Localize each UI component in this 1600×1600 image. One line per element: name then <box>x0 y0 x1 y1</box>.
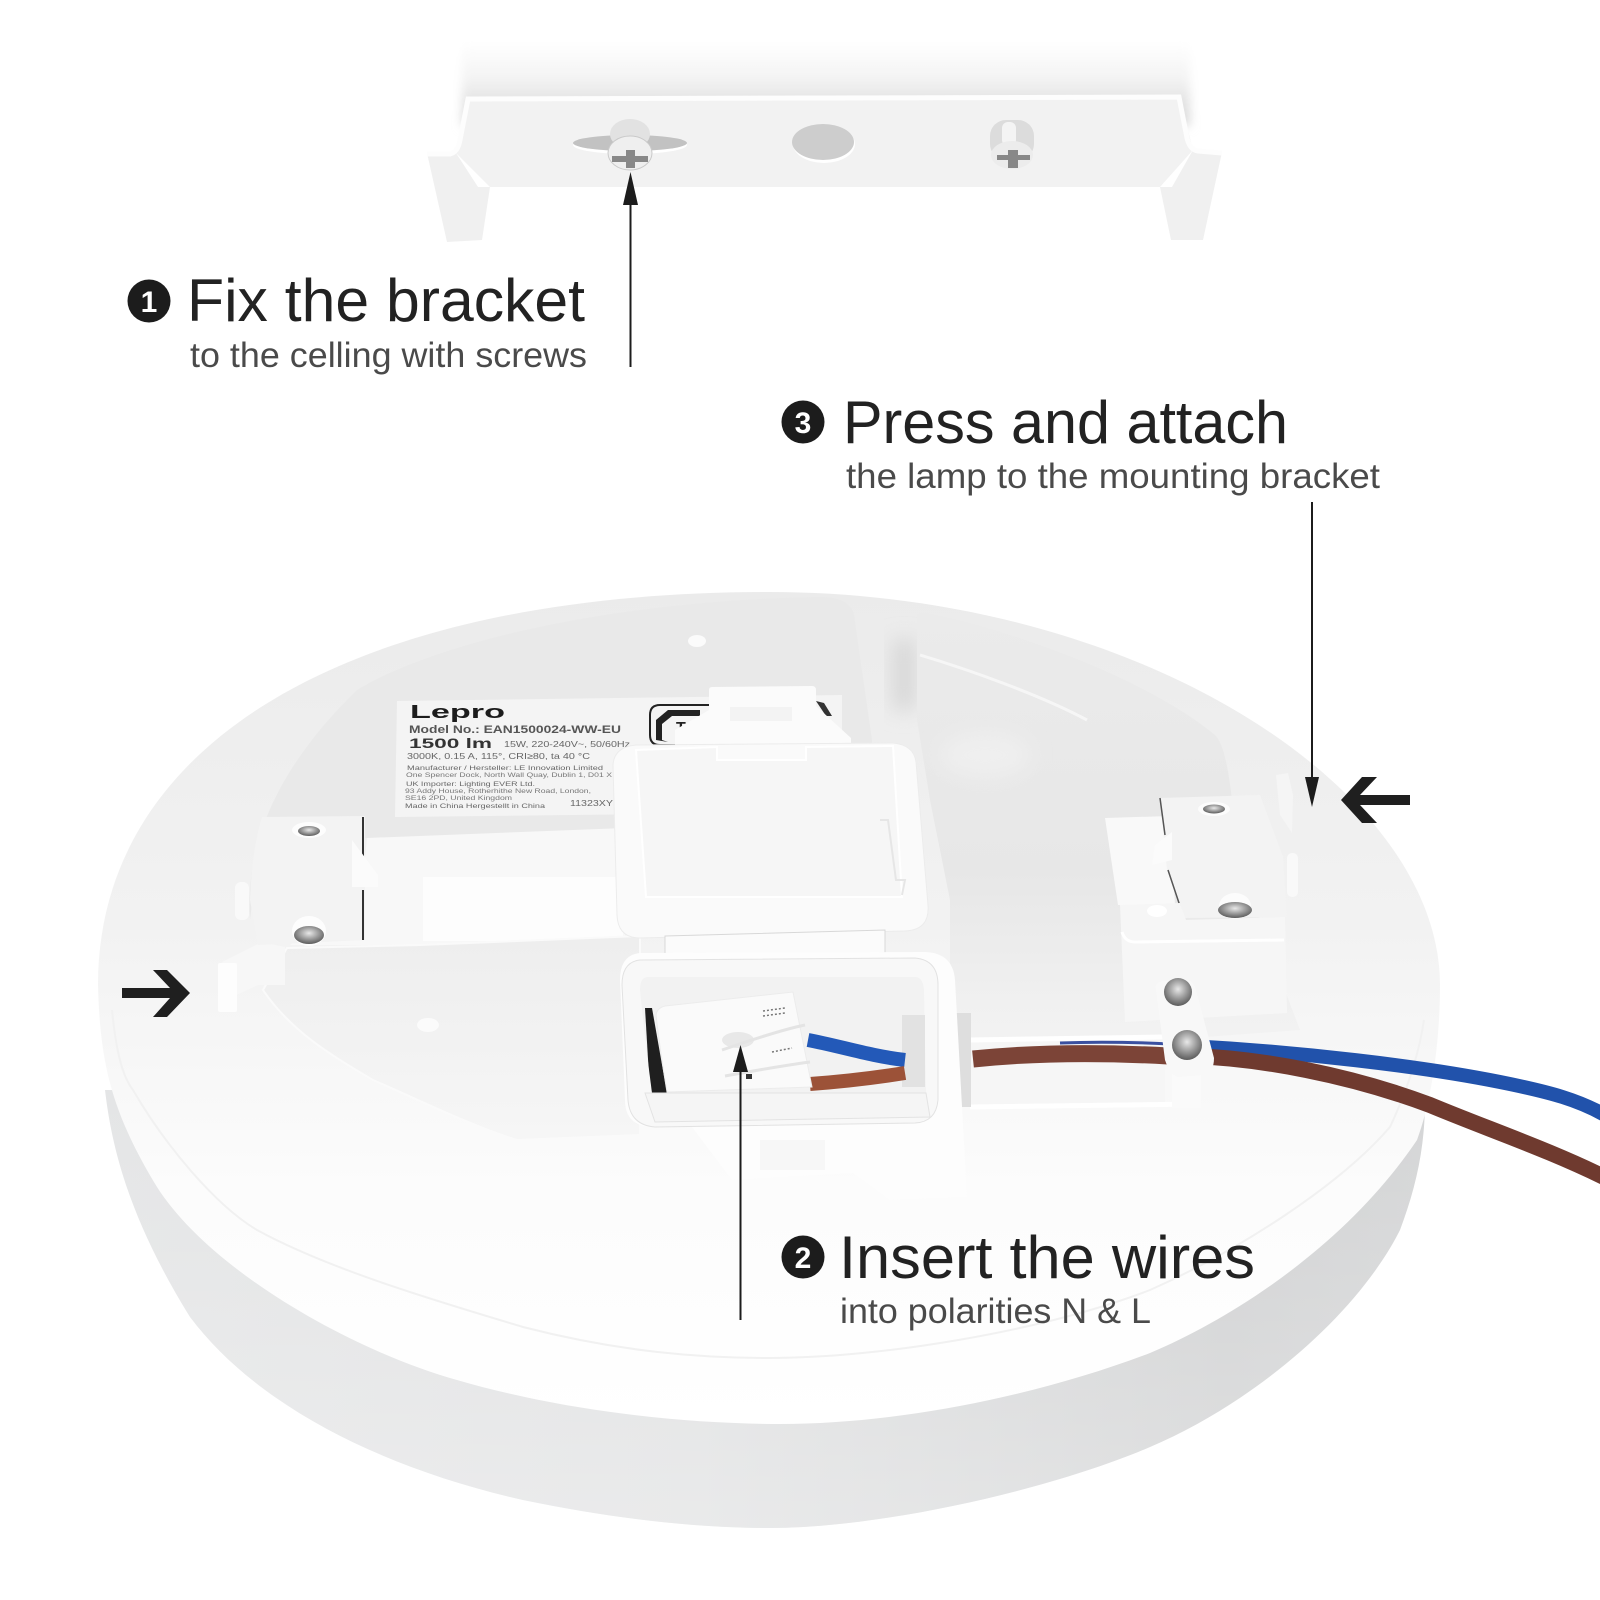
step 1 arrow <box>623 172 638 367</box>
lid inner panel <box>636 746 902 897</box>
right latch knob <box>1287 853 1298 897</box>
step 2 badge: 2 <box>795 1242 811 1275</box>
label sticker: 1500 lm <box>409 735 492 751</box>
label sticker: T <box>676 720 686 737</box>
step 2 arrow <box>733 1045 748 1320</box>
label sticker: SE16 2PD, United Kingdom <box>405 795 512 802</box>
wire blue left sliver <box>1060 1042 1170 1044</box>
wire blue <box>1190 1046 1600 1118</box>
housing highlight edge <box>920 655 1087 720</box>
ceiling lamp <box>98 592 1600 1528</box>
box hinge strap <box>665 930 885 965</box>
disc inner surface line <box>112 1010 1424 1358</box>
label sticker <box>395 695 842 817</box>
step 3 badge <box>782 400 824 444</box>
terminal box body <box>620 930 962 1128</box>
shadow beside raised housing <box>893 640 915 710</box>
cable clamp <box>1155 978 1214 1108</box>
box opening <box>640 977 926 1093</box>
label sticker: 3000K, 0.15 A, 115°, CRI≥80, ta 40 °C <box>407 751 590 761</box>
label sticker: UK Importer: Lighting EVER Ltd. <box>406 781 535 788</box>
wire channel <box>970 1037 1200 1107</box>
left latch arm <box>222 942 285 995</box>
right latch clip <box>1152 832 1172 865</box>
label sticker: Manufacturer / Hersteller: LE Innovation Limited <box>407 765 604 772</box>
bracket plate <box>456 95 1193 187</box>
left latch tab <box>218 963 237 1012</box>
right latch assembly <box>1105 773 1298 919</box>
diffuser <box>105 1090 1425 1528</box>
small holes <box>417 635 706 1032</box>
right latch backing <box>1105 816 1175 905</box>
left latch clip <box>352 840 378 887</box>
housing light wash <box>940 733 1030 777</box>
step 3 heading: Press and attach <box>843 389 1288 456</box>
lid tab recess <box>730 707 792 721</box>
step 3 subheading: the lamp to the mounting bracket <box>846 457 1380 496</box>
channel post <box>955 1013 971 1107</box>
bracket ceiling shadow <box>462 42 1190 126</box>
bright channel under label <box>290 828 625 945</box>
step 2 subheading: into polarities N & L <box>840 1292 1151 1331</box>
bracket left flange <box>427 153 490 242</box>
keyhole slot with screw <box>573 119 687 170</box>
mounting bracket <box>427 95 1222 242</box>
body <box>620 952 967 1200</box>
gasket <box>902 1015 925 1087</box>
lid tab <box>675 686 851 760</box>
wire brown <box>1190 1056 1600 1180</box>
lower hinge catch <box>760 1140 825 1170</box>
right latch plate <box>1160 795 1287 918</box>
label sticker: Model No.: EAN1500024-WW-EU <box>409 724 621 736</box>
step 1 caption <box>128 267 587 375</box>
right latch screws <box>1198 802 1252 919</box>
lid outer <box>613 743 928 938</box>
box wires <box>645 1008 905 1093</box>
label sticker: Lepro <box>410 702 505 722</box>
step 2 caption <box>782 1224 1255 1331</box>
bracket top edge <box>427 97 1222 154</box>
label sticker: 15W, 220-240V~, 50/60Hz <box>504 740 630 749</box>
left latch slots <box>362 817 364 940</box>
box frame <box>622 958 938 1127</box>
wire brown left <box>973 1054 1168 1059</box>
step 3 caption <box>782 389 1380 496</box>
step 1 subheading: to the celling with screws <box>190 336 587 375</box>
label sticker: One Spencer Dock, North Wall Quay, Dublin 1, D01 X <box>406 772 613 779</box>
press arrow left side <box>122 970 190 1017</box>
lid catch notch <box>880 820 905 895</box>
step 2 heading: Insert the wires <box>839 1224 1255 1291</box>
dark connector shadow <box>645 1008 667 1093</box>
left latch assembly <box>218 816 378 1012</box>
left latch screws <box>292 822 326 946</box>
label sticker: 93 Addy House, Rotherhithe New Road, London, <box>405 788 591 795</box>
round hole <box>792 124 855 163</box>
label sticker: 11323XY <box>570 799 614 808</box>
raised housing and central recess <box>917 613 1300 1045</box>
hinged lid <box>613 686 928 938</box>
step 2 badge <box>782 1236 824 1278</box>
junction block <box>1120 903 1287 1022</box>
channel inner highlight <box>423 877 623 941</box>
step 1 heading: Fix the bracket <box>187 267 585 334</box>
lower left recessed plate <box>263 936 640 1140</box>
left latch plate <box>250 816 365 945</box>
box lip <box>645 1093 930 1122</box>
left latch knob <box>235 882 249 920</box>
rear plate with label <box>250 597 872 920</box>
right latch slot <box>1160 798 1184 918</box>
press arrow right side <box>1341 777 1410 823</box>
disc outer rim <box>98 592 1440 1424</box>
step 3 arrow <box>1305 502 1319 807</box>
label sticker: Made in China Hergestellt in China <box>405 803 546 810</box>
bracket right flange <box>1160 150 1222 240</box>
right latch hook <box>1276 773 1293 833</box>
step 1 badge <box>128 280 170 322</box>
step 3 badge: 3 <box>795 407 811 440</box>
step 1 badge: 1 <box>141 286 157 319</box>
push connector <box>656 992 812 1092</box>
second screw <box>990 120 1034 169</box>
